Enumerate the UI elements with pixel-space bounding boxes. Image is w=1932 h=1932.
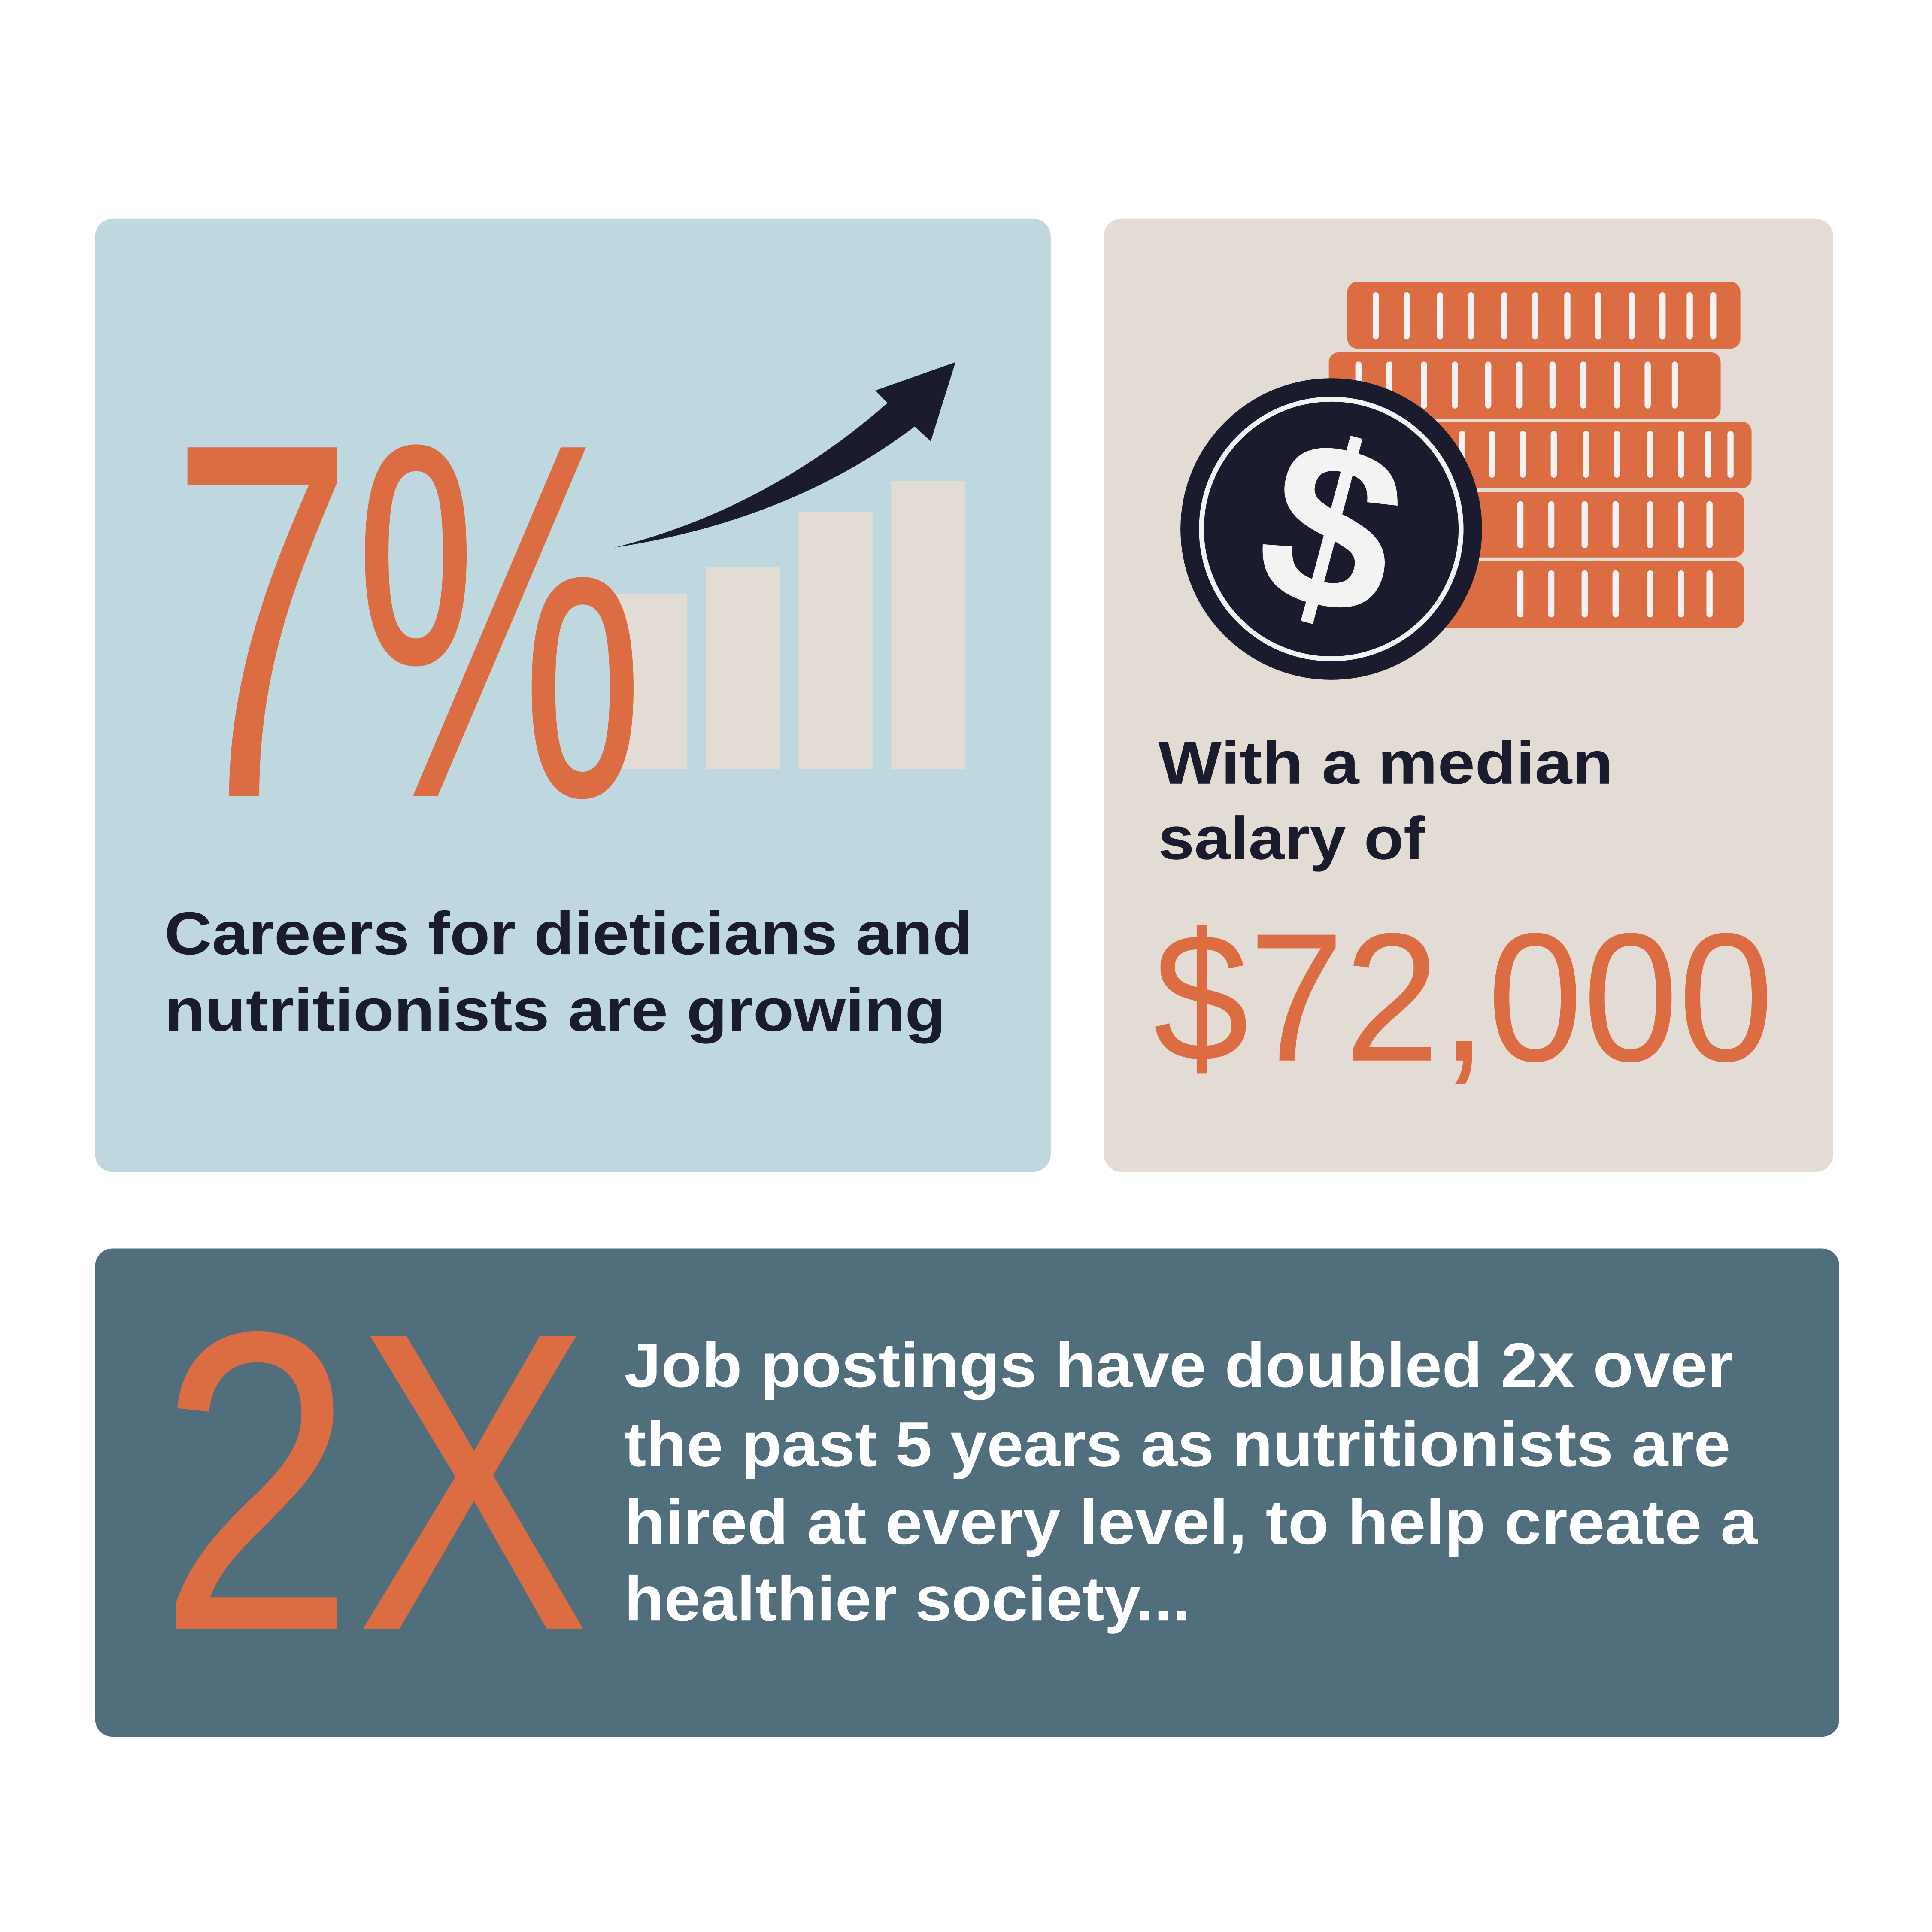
text: median salary label [1158,729,1613,872]
text: careers growing [164,899,973,1044]
text: median salary label: With a median [1158,729,1613,797]
icon: dollar coin [1180,378,1482,680]
icon: dollar coin: $ [1235,383,1429,670]
text: careers growing: nutritionists are growing [164,976,946,1044]
stat: 7%: 7% [170,338,645,904]
panel: growth [95,219,1051,1172]
icon: coin stack [1180,282,1752,680]
text: job postings description: Job postings have doubled 2x over [624,1330,1733,1401]
text: median salary label: salary of [1158,804,1425,872]
stat: $72,000: $72,000 [1153,895,1774,1100]
arrow: growth trend [614,362,955,548]
panel: salary [1104,219,1833,1172]
text: job postings description: hired at every level, to help create a [624,1487,1758,1558]
stat: 2X: 2X [158,1243,591,1720]
bar chart [613,481,965,769]
text: job postings description: the past 5 years as nutritionists are [624,1409,1731,1480]
panel: job postings [95,1243,1839,1737]
text: job postings description [624,1330,1758,1634]
text: careers growing: Careers for dieticians and [164,899,973,967]
text: job postings description: healthier society... [624,1564,1190,1634]
